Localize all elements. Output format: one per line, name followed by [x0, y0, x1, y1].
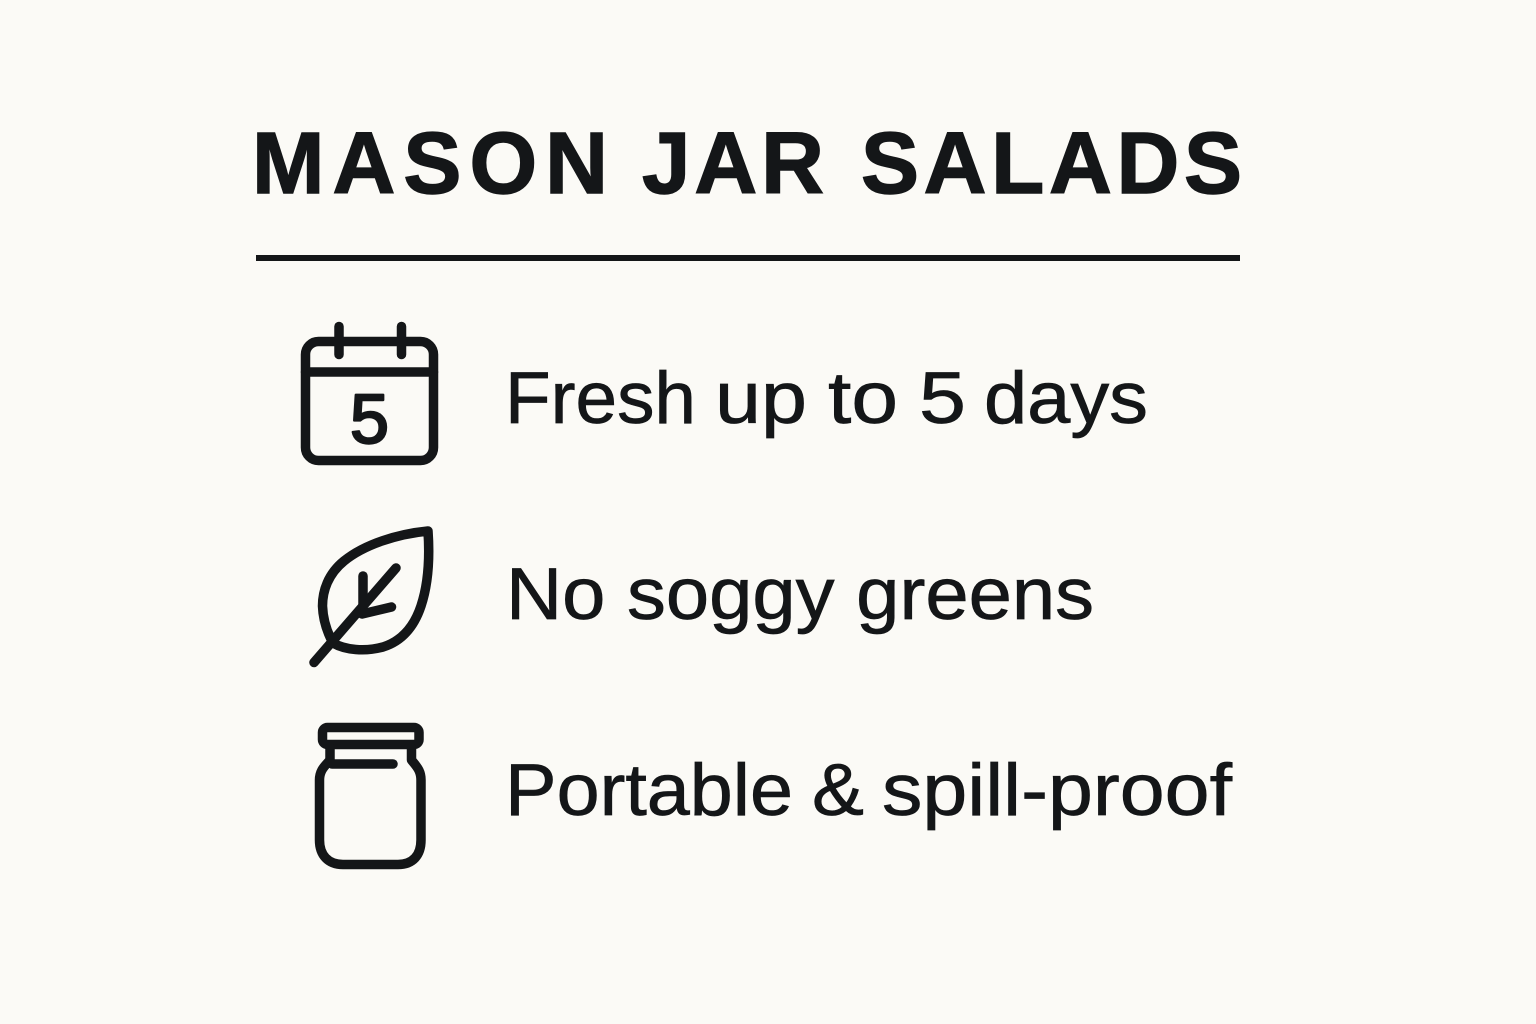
- title: JAR: [642, 115, 824, 212]
- icon: calendar showing day 5: 5: [350, 380, 389, 458]
- text: fresh up to 5 days: [505, 358, 1148, 439]
- icon: calendar showing day 5: [306, 326, 434, 460]
- icon: leaf: [314, 531, 429, 662]
- text: fresh up to 5 days: to: [828, 358, 898, 439]
- text: portable and spill-proof: [505, 750, 1233, 831]
- icon: mason jar: [320, 728, 421, 864]
- text: fresh up to 5 days: Fresh: [505, 358, 696, 439]
- title: SALADS: [861, 115, 1242, 212]
- text: fresh up to 5 days: days: [984, 358, 1148, 439]
- text: fresh up to 5 days: up: [715, 358, 807, 439]
- title: [252, 115, 1242, 212]
- text: no soggy greens: No soggy greens: [506, 554, 1094, 635]
- text: fresh up to 5 days: 5: [919, 358, 966, 439]
- text: portable and spill-proof: spill-proof: [882, 750, 1233, 831]
- text: portable and spill-proof: Portable: [505, 750, 793, 831]
- title: MASON: [252, 115, 608, 212]
- text: portable and spill-proof: &: [812, 750, 864, 831]
